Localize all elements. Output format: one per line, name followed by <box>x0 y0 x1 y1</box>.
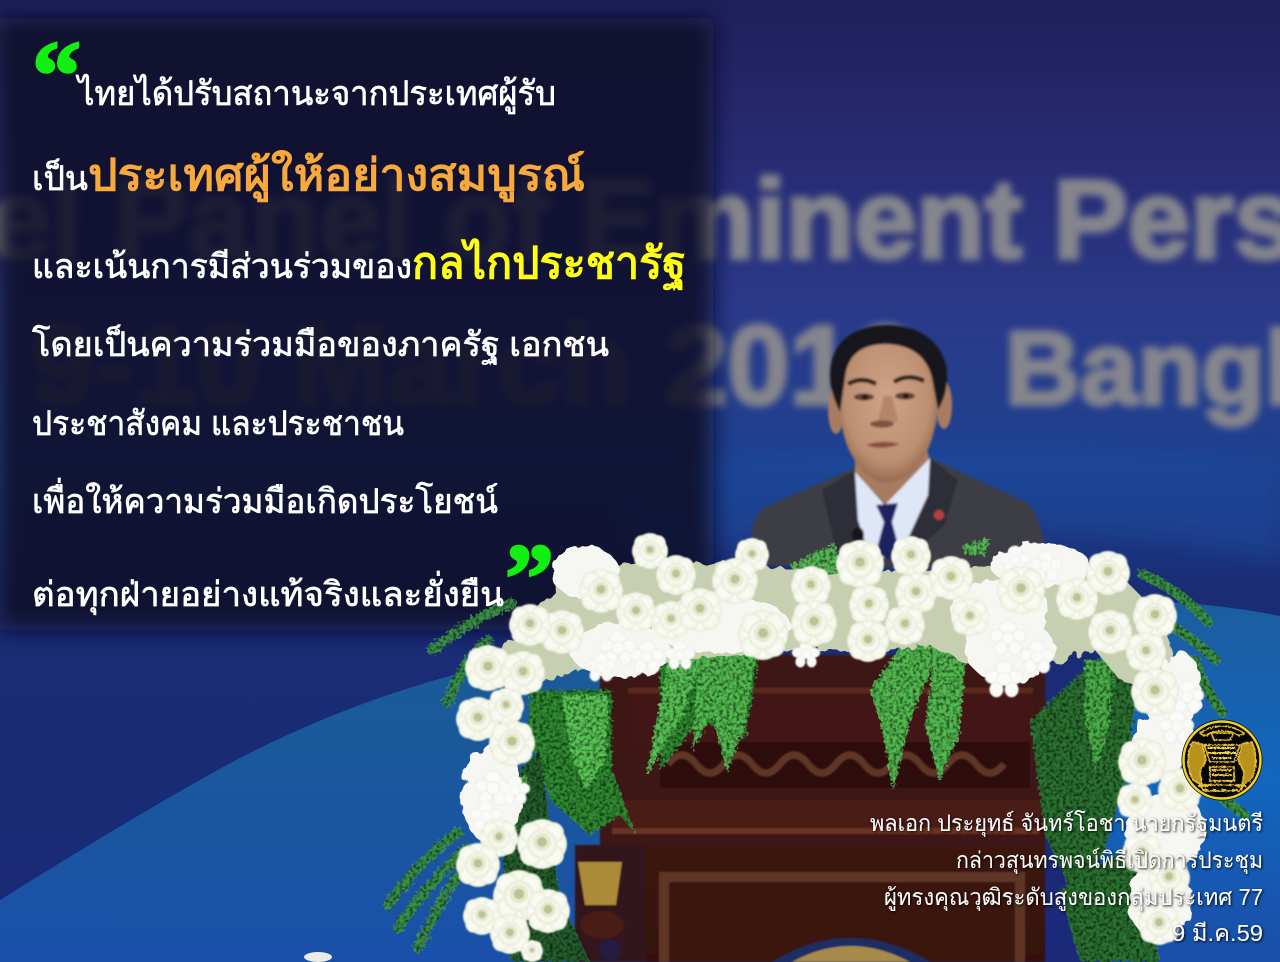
fern: left frond bright <box>562 695 608 790</box>
orchid blossoms <box>470 546 1204 831</box>
opening quotation mark: “ <box>32 22 81 130</box>
lectern upper panel <box>628 693 1033 741</box>
lotus flowers: left cascade <box>456 645 570 962</box>
closing quotation mark: ” <box>505 525 554 633</box>
small flower at bottom edge <box>304 952 332 962</box>
quote line 3 lead: และเน้นการมีส่วนร่วมของ <box>32 248 412 286</box>
quote line 5: ประชาสังคม และประชาชน <box>32 405 404 443</box>
fern: right frond bright <box>1085 660 1115 770</box>
lotus flowers: top garland <box>509 533 1179 716</box>
blurred backdrop banner text: 9-10 March <box>30 301 631 429</box>
fern: lower left inner <box>500 750 590 962</box>
wooden lectern <box>575 655 1098 962</box>
speaker suit <box>750 458 1045 570</box>
lectern upper rail <box>628 688 1033 693</box>
lectern lower rail <box>612 800 1040 828</box>
quote line 2 highlight: ประเทศผู้ให้อย่างสมบูรณ์ <box>88 149 585 202</box>
lectern ledge <box>612 828 1040 834</box>
white orchid mass <box>462 543 1205 940</box>
blurred backdrop banner text <box>0 157 1280 429</box>
lectern left column <box>575 845 645 962</box>
fern: right mass <box>1030 660 1140 900</box>
speaker: Prime Minister at podium <box>750 325 1045 570</box>
caption line 1: พลเอก ประยุทธ์ จันทร์โอชา นายกรัฐมนตรี <box>870 810 1263 837</box>
fern: frond upper centre-left B <box>692 640 755 772</box>
lotus flowers: right cascade <box>1117 738 1202 945</box>
blurred backdrop banner text: 2016, <box>665 303 945 428</box>
speaker caption <box>870 810 1263 946</box>
fern: lower left frond <box>495 775 530 860</box>
fern sprigs <box>388 574 1245 948</box>
quote line 1: ไทยได้ปรับสถานะจากประเทศผู้รับ <box>75 74 556 114</box>
quote line 7: ต่อทุกฝ่ายอย่างแท้จริงและยั่งยืน <box>32 571 504 615</box>
emblem seal: Royal Thai Government <box>1182 720 1262 800</box>
sprig: top right <box>1142 574 1245 815</box>
caption line 3: ผู้ทรงคุณวุฒิระดับสูงของกลุ่มประเทศ 77 <box>884 884 1263 911</box>
blurred backdrop banner text: el Panel of Eminent Pers <box>0 157 1280 282</box>
seal crest details <box>1188 726 1256 791</box>
gold capital right <box>1065 870 1098 892</box>
fern: dark mass centre-left <box>660 650 760 770</box>
fern: lower right <box>1060 840 1160 962</box>
garland underlay <box>500 560 1175 690</box>
speaker neck <box>855 440 930 508</box>
lectern lower carved frame <box>664 877 1020 962</box>
fern garlands <box>495 538 1160 962</box>
caption line 2: กล่าวสุนทรพจน์พิธีเปิดการประชุม <box>956 847 1263 874</box>
speaker tie <box>876 503 900 560</box>
dark translucent text panel <box>0 18 713 630</box>
quote line 3 highlight: กลไกประชารัฐ <box>412 237 686 291</box>
fern: top leaf sprig <box>790 538 990 578</box>
quote line 6: เพื่อให้ความร่วมมือเกิดประโยชน์ <box>32 478 498 521</box>
column base <box>580 911 624 939</box>
sprig: lower left <box>388 832 468 948</box>
quote line 2 lead: เป็น <box>32 158 88 198</box>
speaker lapel pin <box>934 510 944 520</box>
gold capital left <box>578 862 622 905</box>
speaker microphone <box>852 527 864 543</box>
quote text panel <box>32 22 686 633</box>
sprig: top left <box>432 603 512 703</box>
quote line 4: โดยเป็นความร่วมมือของภาครัฐ เอกชน <box>32 324 609 365</box>
speaker shirt collar <box>855 458 930 565</box>
lectern carved band <box>660 742 1030 788</box>
fern: upper centre-right frond 2 <box>925 650 966 782</box>
suit lapels <box>822 458 958 565</box>
lectern emblem <box>772 938 930 962</box>
fern: frond upper centre-left A <box>646 640 705 776</box>
fern: upper centre-right frond 1 <box>870 640 940 790</box>
fern: left mass dark <box>528 690 636 835</box>
caption line 4: 9 มี.ค.59 <box>1172 920 1263 946</box>
column ball <box>599 939 621 961</box>
speaker head <box>828 325 952 482</box>
